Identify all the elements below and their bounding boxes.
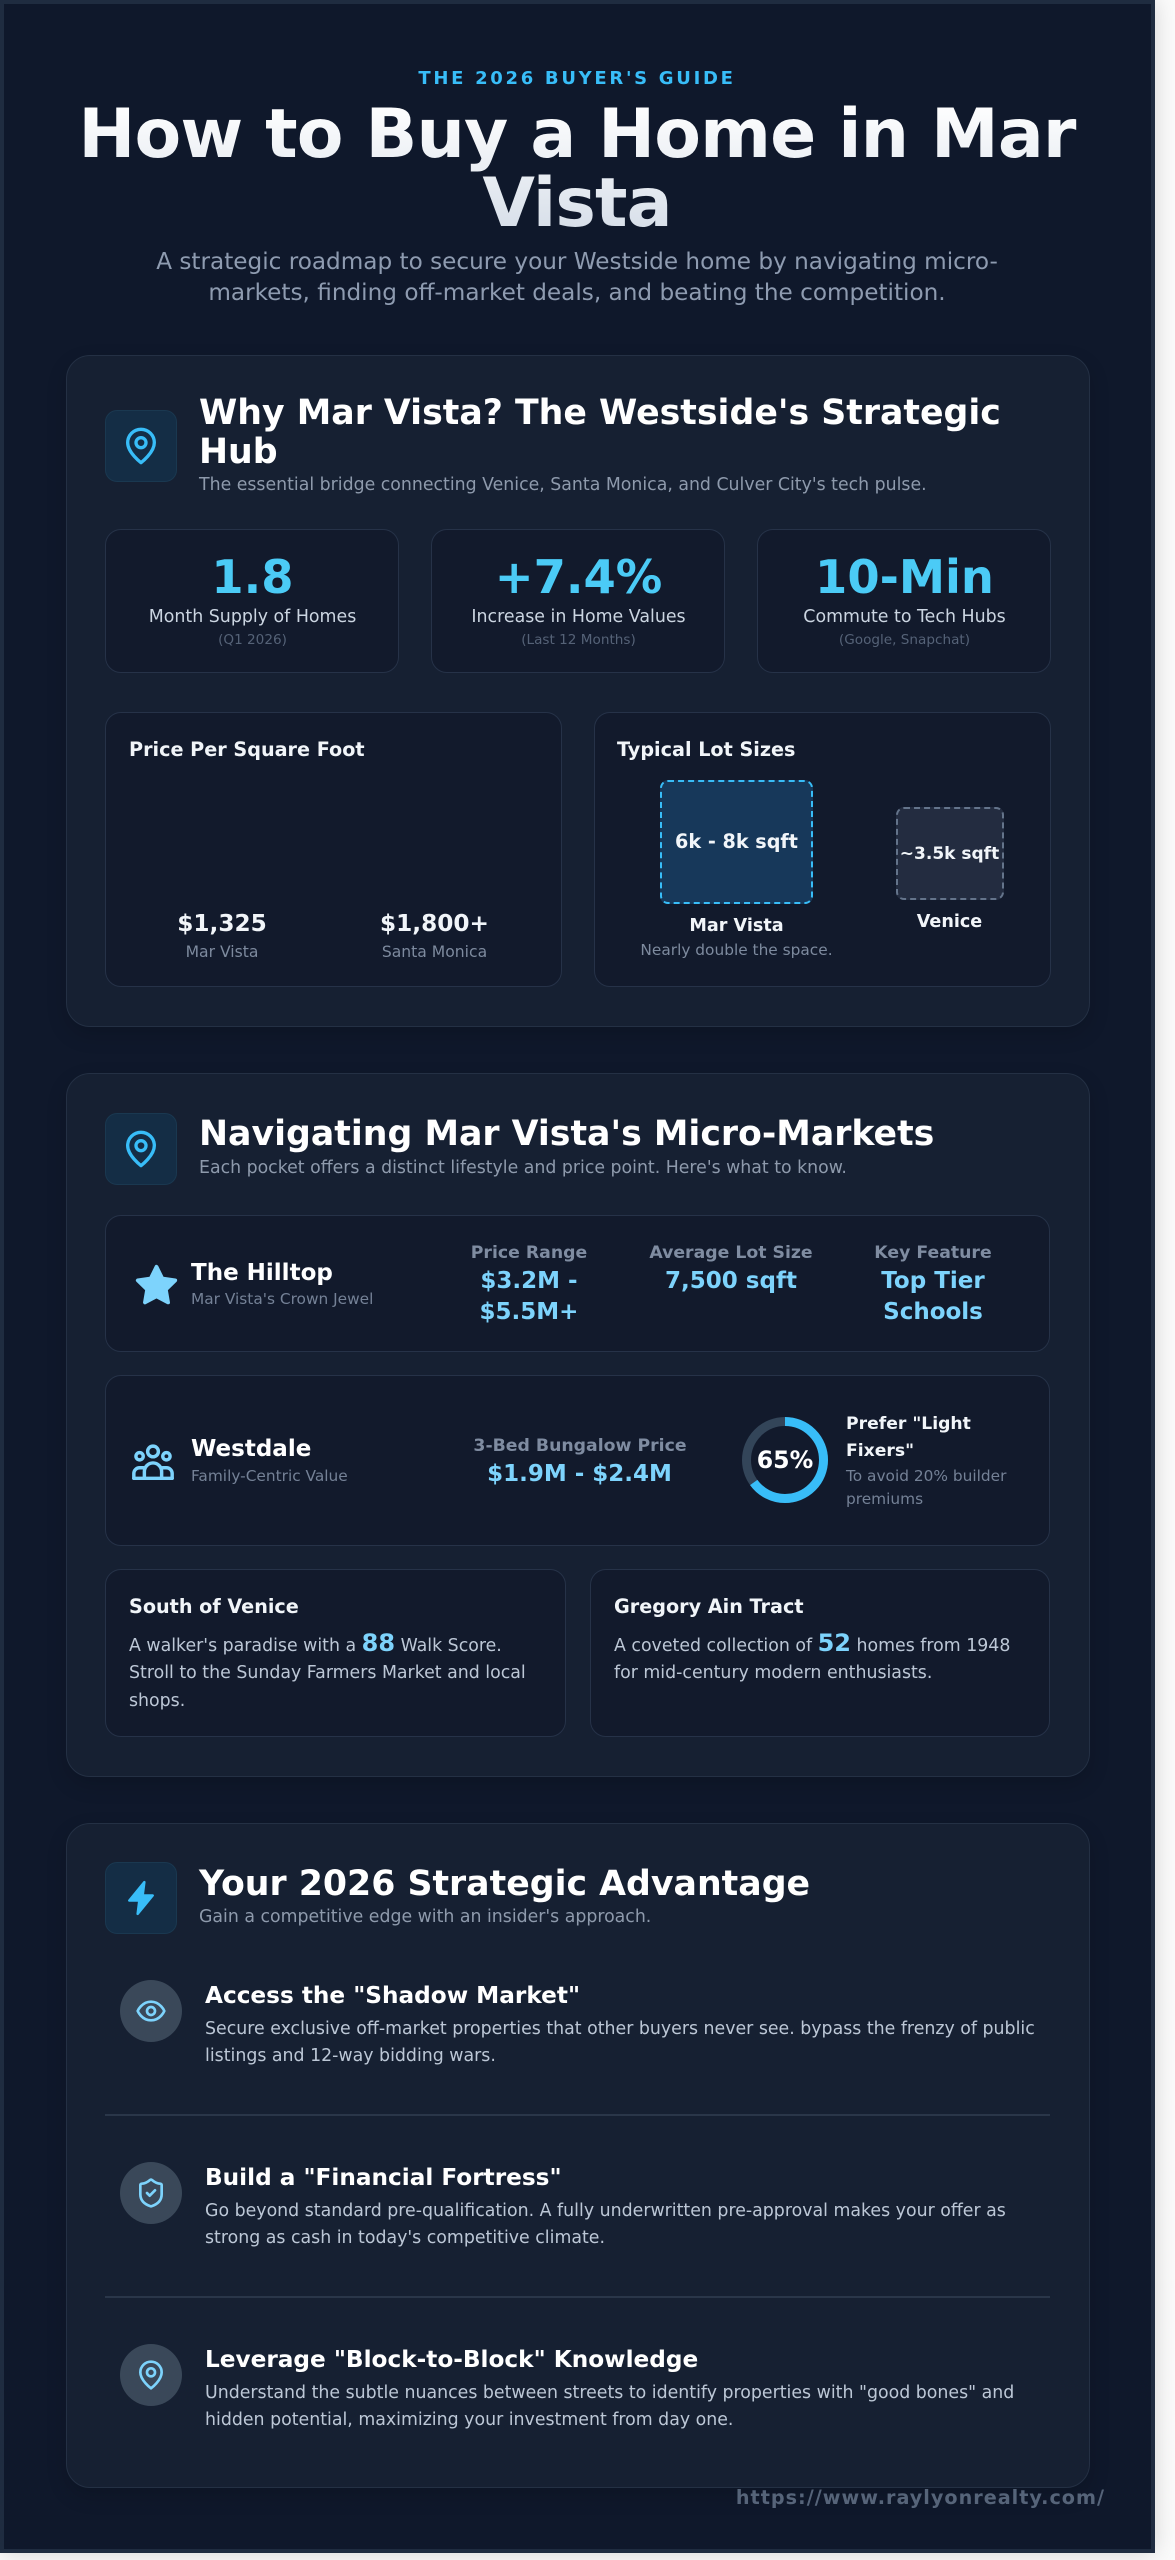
row: the hilltop: Top Tier — [881, 1268, 985, 1294]
stat: commute: (Google, Snapchat) — [839, 632, 970, 648]
card: gregory ain tract: A coveted collection of 52 homes from 1948 — [614, 1628, 1010, 1656]
heading: why mar vista — [199, 393, 1001, 472]
section subtitle: The essential bridge connecting Venice, Santa Monica, and Culver City's tech pulse. — [199, 475, 927, 495]
icon: family group — [132, 1444, 174, 1480]
row: the hilltop: Schools — [883, 1299, 983, 1325]
chart: price per square foot: $1,325 — [177, 910, 267, 937]
row: the hilltop: Key Feature — [874, 1243, 992, 1263]
item: financial fortress: strong as cash in today's competitive climate. — [205, 2228, 605, 2248]
chart: typical lot sizes: Typical Lot Sizes — [617, 738, 795, 761]
item: shadow market: listings and 12-way bidding wars. — [205, 2046, 496, 2066]
icon: location pin — [105, 410, 177, 482]
item: financial fortress: Build a "Financial Fortress" — [205, 2164, 562, 2191]
subtitle: A strategic roadmap to secure your Westside home by navigating micro- — [156, 249, 998, 275]
item: block-to-block: hidden potential, maximizing your investment from day one. — [205, 2410, 733, 2430]
stat: month supply: 1.8 — [211, 550, 294, 604]
card: gregory ain tract: for mid-century modern enthusiasts. — [614, 1663, 932, 1683]
row: westdale: 3-Bed Bungalow Price — [473, 1436, 687, 1456]
card: south of venice: A walker's paradise with a 88 Walk Score. — [129, 1628, 502, 1656]
chart: typical lot sizes — [594, 712, 1051, 987]
donut chart: 65 percent: 65% — [756, 1446, 813, 1474]
icon: lightning bolt — [105, 1862, 177, 1934]
panel: strategic advantage — [66, 1823, 1090, 2488]
row: westdale — [105, 1375, 1050, 1546]
chart: price per square foot — [105, 712, 562, 987]
divider — [105, 2296, 1050, 2298]
subtitle — [156, 249, 998, 306]
stat: home values: +7.4% — [495, 550, 662, 604]
row: the hilltop: Mar Vista's Crown Jewel — [191, 1290, 373, 1308]
row: westdale: Westdale — [191, 1436, 311, 1462]
card: south of venice: shops. — [129, 1690, 185, 1710]
row: westdale: Fixers" — [846, 1441, 914, 1461]
chart: typical lot sizes: Mar Vista — [689, 916, 784, 936]
heading: why mar vista: Why Mar Vista? The Westside's Strategic — [199, 393, 1001, 433]
section subtitle: Gain a competitive edge with an insider's approach. — [199, 1907, 651, 1927]
row: the hilltop — [105, 1215, 1050, 1352]
title: Vista — [482, 164, 672, 242]
icon: eye — [120, 1980, 182, 2042]
section subtitle: Each pocket offers a distinct lifestyle and price point. Here's what to know. — [199, 1158, 847, 1178]
panel: why mar vista — [66, 355, 1090, 1027]
row: westdale: Prefer "Light — [846, 1414, 971, 1434]
card: gregory ain tract — [590, 1569, 1050, 1737]
stat: home values: (Last 12 Months) — [521, 632, 636, 648]
heading: strategic advantage: Your 2026 Strategic Advantage — [199, 1864, 810, 1904]
chart: price per square foot: Santa Monica — [382, 943, 487, 961]
item: block-to-block: Leverage "Block-to-Block" Knowledge — [205, 2346, 698, 2373]
icon: location pin — [120, 2344, 182, 2406]
item: shadow market — [205, 1982, 1035, 2066]
divider — [105, 2114, 1050, 2116]
item: shadow market: Access the "Shadow Market" — [205, 1982, 580, 2009]
row: westdale: Family-Centric Value — [191, 1467, 348, 1485]
item: shadow market: Secure exclusive off-market properties that other buyers never see. bypass the frenzy of public — [205, 2019, 1035, 2039]
card: south of venice: South of Venice — [129, 1595, 299, 1618]
subtitle: markets, finding off-market deals, and beating the competition. — [208, 280, 946, 306]
title — [47, 101, 1107, 238]
heading: micro-markets: Navigating Mar Vista's Micro-Markets — [199, 1114, 934, 1154]
row: westdale: $1.9M - $2.4M — [487, 1461, 672, 1487]
chart: typical lot sizes: ~3.5k sqft — [900, 844, 999, 864]
stat: month supply — [105, 529, 399, 673]
row: the hilltop: $3.2M - — [480, 1268, 578, 1294]
heading: why mar vista: Hub — [199, 432, 278, 472]
chart: typical lot sizes: Venice — [917, 912, 982, 932]
stat: month supply: Month Supply of Homes — [149, 607, 356, 627]
chart: price per square foot: $1,800+ — [380, 910, 489, 937]
row: the hilltop: $5.5M+ — [480, 1299, 578, 1325]
icon: shield check — [120, 2162, 182, 2224]
chart: typical lot sizes: Nearly double the space. — [640, 941, 833, 959]
row: the hilltop: 7,500 sqft — [665, 1268, 797, 1294]
chart: price per square foot: Mar Vista — [186, 943, 258, 961]
item: block-to-block: Understand the subtle nuances between streets to identify properties with "good bones" and — [205, 2382, 1014, 2402]
item: financial fortress: Go beyond standard pre-qualification. A fully underwritten pre-approval makes your offer as — [205, 2200, 1006, 2220]
icon: location pin — [105, 1113, 177, 1185]
eyebrow: THE 2026 BUYER'S GUIDE — [418, 68, 736, 89]
stat: month supply: (Q1 2026) — [218, 632, 287, 648]
chart: typical lot sizes: 6k - 8k sqft — [675, 830, 798, 853]
stat: commute: Commute to Tech Hubs — [803, 607, 1006, 627]
stat: commute: 10-Min — [815, 550, 994, 604]
card: south of venice: Stroll to the Sunday Farmers Market and local — [129, 1663, 526, 1683]
panel: micro-markets — [66, 1073, 1090, 1777]
stat: home values: Increase in Home Values — [471, 607, 686, 627]
stat: commute — [757, 529, 1051, 673]
row: westdale: premiums — [846, 1490, 923, 1508]
row: the hilltop: Price Range — [471, 1243, 587, 1263]
row: the hilltop: Average Lot Size — [649, 1243, 813, 1263]
row: westdale: To avoid 20% builder — [846, 1467, 1006, 1485]
item: financial fortress — [205, 2164, 1006, 2248]
row: the hilltop: The Hilltop — [191, 1260, 333, 1286]
chart: price per square foot: Price Per Square Foot — [129, 738, 365, 761]
footer url: https://www.raylyonrealty.com/ — [736, 2486, 1105, 2509]
donut chart: 65 percent — [742, 1417, 828, 1503]
stat: home values — [431, 529, 725, 673]
card: gregory ain tract: Gregory Ain Tract — [614, 1595, 804, 1618]
title: How to Buy a Home in Mar — [78, 95, 1076, 174]
card: south of venice — [105, 1569, 566, 1737]
icon: star — [136, 1264, 178, 1304]
item: block-to-block — [205, 2346, 1014, 2430]
